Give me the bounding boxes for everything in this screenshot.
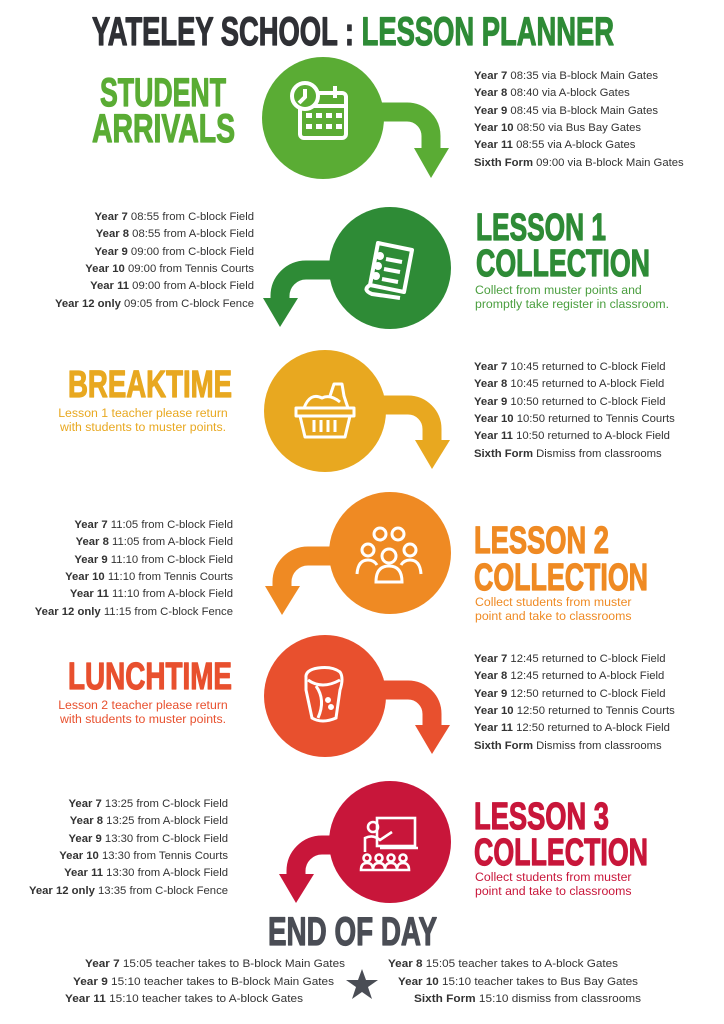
text block: end of day left: Year 7 15:05 teacher takes to B-block Main Gates xyxy=(85,958,345,970)
heading: lesson 3 collection: point and take to classrooms xyxy=(475,884,632,898)
heading: breaktime: BREAKTIME xyxy=(68,364,232,406)
text block: lunch returns: Year 10 12:50 returned to Tennis Courts xyxy=(474,705,675,717)
text block: lesson 2 pickup: Year 12 only 11:15 from C-block Fence xyxy=(35,606,233,618)
text block: arrival times: Year 7 08:35 via B-block Main Gates xyxy=(474,70,658,82)
heading: lesson 3 collection: Collect students from muster xyxy=(475,870,632,884)
text block: break returns: Year 11 10:50 returned to A-block Field xyxy=(474,430,670,442)
icon: star xyxy=(346,969,378,999)
text block: lesson 3 pickup: Year 8 13:25 from A-block Field xyxy=(70,815,228,827)
arrow: lesson 3 xyxy=(279,845,390,903)
heading: end of day: END OF DAY xyxy=(268,910,437,954)
text block: break returns: Year 9 10:50 returned to C-block Field xyxy=(474,396,666,408)
text block: break returns: Sixth Form Dismiss from classrooms xyxy=(474,448,662,460)
panel: lesson 3 collection xyxy=(29,781,648,903)
heading: lesson 2 collection: COLLECTION xyxy=(474,557,648,599)
heading: student arrivals: STUDENT xyxy=(100,71,226,115)
arrow: lunchtime xyxy=(320,690,450,754)
text block: break returns: Year 7 10:45 returned to C-block Field xyxy=(474,361,666,373)
icon circle: wrap xyxy=(264,635,386,757)
text block: lesson 2 pickup: Year 8 11:05 from A-block Field xyxy=(76,536,233,548)
text block: lesson 1 pickup: Year 9 09:00 from C-block Field xyxy=(94,246,254,258)
icon circle: register xyxy=(329,207,451,329)
text block: lesson 3 pickup: Year 9 13:30 from C-block Field xyxy=(68,833,228,845)
heading: lesson 3 collection xyxy=(474,796,648,898)
heading: student arrivals: ARRIVALS xyxy=(92,107,235,151)
text block: lesson 3 pickup: Year 12 only 13:35 from C-block Fence xyxy=(29,885,228,897)
text block: lunch returns: Year 11 12:50 returned to A-block Field xyxy=(474,722,670,734)
text block: lesson 3 pickup xyxy=(29,798,228,897)
heading: lesson 1 collection: COLLECTION xyxy=(476,243,650,285)
heading: lunchtime: with students to muster points. xyxy=(59,712,226,726)
text block: lesson 1 pickup: Year 7 08:55 from C-block Field xyxy=(94,211,254,223)
text block: end of day left xyxy=(65,958,345,1005)
icon circle: calendar clock xyxy=(262,57,384,179)
text block: lesson 3 pickup: Year 10 13:30 from Tennis Courts xyxy=(59,850,228,862)
arrow: lesson 1 xyxy=(263,270,390,327)
heading: breaktime xyxy=(58,364,232,434)
title: YATELEY SCHOOL : LESSON PLANNER xyxy=(92,10,614,54)
text block: lunch returns xyxy=(474,653,675,752)
icon circle: food basket xyxy=(264,350,386,472)
panel: student arrivals xyxy=(92,57,684,179)
heading: lunchtime xyxy=(58,656,232,726)
text block: lesson 2 pickup xyxy=(35,519,233,618)
heading: lesson 1 collection: LESSON 1 xyxy=(476,207,606,249)
heading: lesson 1 collection xyxy=(475,207,669,311)
heading: student arrivals xyxy=(92,71,235,151)
heading: lesson 3 collection: COLLECTION xyxy=(474,832,648,874)
text block: arrival times xyxy=(474,70,684,169)
text block: break returns: Year 8 10:45 returned to A-block Field xyxy=(474,378,664,390)
heading: lesson 1 collection: Collect from muster points and xyxy=(475,283,642,297)
heading: lunchtime: Lesson 2 teacher please return xyxy=(58,698,228,712)
text block: lunch returns: Year 8 12:45 returned to A-block Field xyxy=(474,670,664,682)
icon circle: teacher xyxy=(329,781,451,903)
text block: lesson 3 pickup: Year 7 13:25 from C-block Field xyxy=(68,798,228,810)
panel: lunchtime xyxy=(58,635,675,757)
text block: lesson 1 pickup: Year 11 09:00 from A-block Field xyxy=(90,280,254,292)
text block: end of day right xyxy=(388,958,641,1005)
text block: lesson 1 pickup: Year 12 only 09:05 from C-block Fence xyxy=(55,298,254,310)
heading: lesson 2 collection xyxy=(474,520,648,623)
text block: lunch returns: Sixth Form Dismiss from classrooms xyxy=(474,740,662,752)
text block: break returns xyxy=(474,361,675,460)
text block: lesson 3 pickup: Year 11 13:30 from A-block Field xyxy=(64,867,228,879)
text block: lesson 2 pickup: Year 11 11:10 from A-block Field xyxy=(70,588,233,600)
text block: lunch returns: Year 9 12:50 returned to C-block Field xyxy=(474,688,666,700)
text block: end of day right: Year 10 15:10 teacher takes to Bus Bay Gates xyxy=(398,976,638,988)
text block: arrival times: Year 11 08:55 via A-block Gates xyxy=(474,139,636,151)
heading: lesson 2 collection: LESSON 2 xyxy=(474,520,609,562)
text block: lunch returns: Year 7 12:45 returned to C-block Field xyxy=(474,653,666,665)
heading: lesson 1 collection: promptly take register in classroom. xyxy=(475,297,669,311)
panel: end of day xyxy=(65,910,641,1005)
arrow: arrivals xyxy=(320,112,449,178)
arrow: lesson 2 xyxy=(265,556,390,615)
text block: lesson 2 pickup: Year 7 11:05 from C-block Field xyxy=(74,519,233,531)
text block: lesson 1 pickup xyxy=(55,211,254,310)
heading: lunchtime: LUNCHTIME xyxy=(68,656,232,698)
text block: arrival times: Year 10 08:50 via Bus Bay Gates xyxy=(474,122,641,134)
heading: lesson 3 collection: LESSON 3 xyxy=(474,796,609,838)
text block: end of day left: Year 9 15:10 teacher takes to B-block Main Gates xyxy=(73,976,334,988)
text block: end of day left: Year 11 15:10 teacher takes to A-block Gates xyxy=(65,993,303,1005)
text block: arrival times: Year 8 08:40 via A-block Gates xyxy=(474,87,630,99)
panel: lesson 2 collection xyxy=(35,492,648,623)
text block: break returns: Year 10 10:50 returned to Tennis Courts xyxy=(474,413,675,425)
arrow: breaktime xyxy=(320,405,450,469)
heading: lesson 2 collection: point and take to classrooms xyxy=(475,609,632,623)
panel: breaktime xyxy=(58,350,675,472)
text block: arrival times: Year 9 08:45 via B-block Main Gates xyxy=(474,105,658,117)
heading: lesson 2 collection: Collect students from muster xyxy=(475,595,632,609)
text block: lesson 1 pickup: Year 10 09:00 from Tennis Courts xyxy=(85,263,254,275)
heading: breaktime: Lesson 1 teacher please return xyxy=(58,406,228,420)
text block: lesson 2 pickup: Year 10 11:10 from Tennis Courts xyxy=(65,571,233,583)
heading: breaktime: with students to muster points. xyxy=(59,420,226,434)
text block: end of day right: Year 8 15:05 teacher takes to A-block Gates xyxy=(388,958,618,970)
panel: lesson 1 collection xyxy=(55,207,669,329)
icon circle: group xyxy=(329,492,451,614)
text block: end of day right: Sixth Form 15:10 dismiss from classrooms xyxy=(414,993,641,1005)
text block: lesson 2 pickup: Year 9 11:10 from C-block Field xyxy=(74,554,233,566)
text block: arrival times: Sixth Form 09:00 via B-block Main Gates xyxy=(474,157,684,169)
text block: lesson 1 pickup: Year 8 08:55 from A-block Field xyxy=(96,228,254,240)
